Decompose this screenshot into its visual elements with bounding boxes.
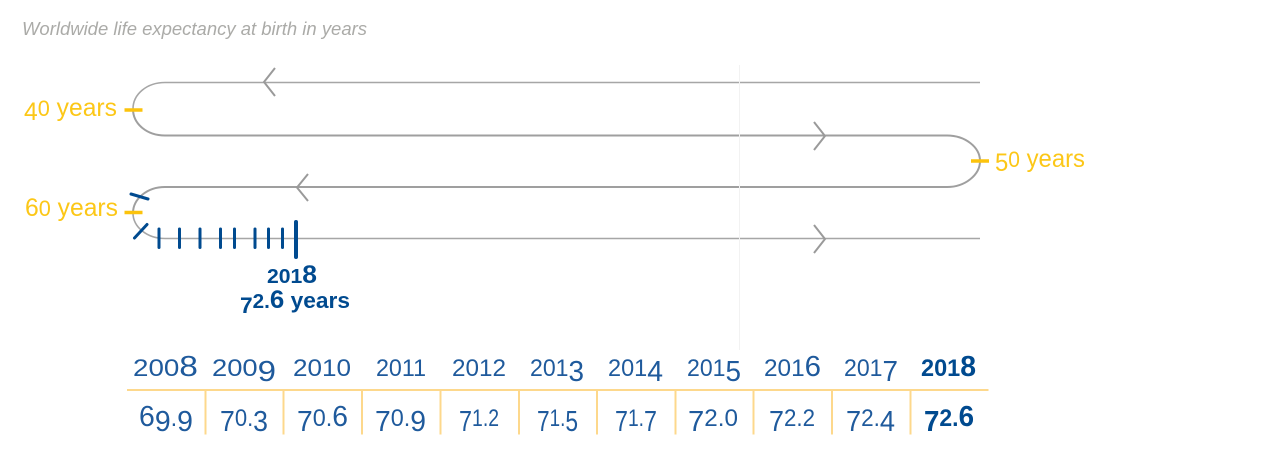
value row: 7 <box>297 406 313 438</box>
value row: 7 <box>459 406 472 438</box>
value row: 7 <box>644 406 657 438</box>
year row <box>133 351 976 388</box>
life expectancy ticks 2008 to 2018 <box>131 194 296 257</box>
year row: 201 <box>608 355 648 382</box>
year row: 5 <box>725 356 741 388</box>
year row: 2016 <box>764 351 821 383</box>
value row: . <box>171 405 177 432</box>
year row: 2010 <box>293 355 351 382</box>
year row: 2008 <box>133 351 198 383</box>
callout: 2018 value: 2018 <box>267 261 317 289</box>
marker: 40 years <box>24 94 142 126</box>
value row: 9 <box>410 406 426 438</box>
data table <box>127 351 988 438</box>
year row: 201 <box>530 355 570 382</box>
value row: 7 <box>846 406 861 438</box>
year row: 2012 <box>452 355 506 382</box>
value row: 2. <box>939 405 959 432</box>
callout: 2018 value <box>240 261 350 318</box>
arrow: leftward, 40-year row <box>264 68 275 96</box>
marker: 50 years: 5 <box>995 149 1008 177</box>
year row: 2018 <box>921 351 976 383</box>
year row: 9 <box>258 356 276 388</box>
marker: 60 years: 60 years <box>25 194 118 222</box>
marker: 50 years: years <box>1027 145 1088 173</box>
value row: 1.2 <box>472 405 499 432</box>
value row: 2.2 <box>784 405 815 432</box>
value row: 5 <box>565 406 578 438</box>
value row: 2.0 <box>704 405 738 432</box>
value row: 0. <box>391 405 410 432</box>
value row: 0. <box>313 405 332 432</box>
year row: 7 <box>882 356 898 388</box>
value row: 0. <box>235 405 253 432</box>
value row: 7 <box>375 406 391 438</box>
value row: 7 <box>924 406 939 438</box>
value row: 7 <box>220 406 235 438</box>
year row: 3 <box>568 356 584 388</box>
marker: 40 years: 4 <box>24 98 38 126</box>
year row: 2011 <box>376 355 426 382</box>
callout: 2018 value: 2. <box>253 291 270 313</box>
callout: 2018 value: 6 years <box>270 286 348 314</box>
table rules <box>127 390 988 434</box>
marker: 40 years: years <box>57 94 118 122</box>
value row: 4 <box>880 406 895 438</box>
value row: 6 <box>959 401 974 433</box>
year row: 201 <box>844 355 884 382</box>
value row: 6 <box>332 401 348 433</box>
serpentine timeline <box>133 65 980 350</box>
value row: 9 <box>177 406 193 438</box>
arrow: rightward, final row <box>814 225 825 253</box>
value row: 1. <box>628 405 644 432</box>
value row: 6 <box>139 401 155 433</box>
subtitle: Worldwide life expectancy at birth in years <box>22 19 367 39</box>
value row: 7 <box>537 406 550 438</box>
year row: 200 <box>212 355 252 382</box>
value row: 7 <box>615 406 628 438</box>
arrow: rightward, 50-year row <box>814 122 825 150</box>
value row: 7 <box>769 406 784 438</box>
marker: 40 years: 0 <box>38 96 50 121</box>
value row: 7 <box>688 406 704 438</box>
timeline track <box>133 82 980 238</box>
year row: 4 <box>647 356 663 388</box>
faint vertical guide <box>738 65 740 350</box>
value row: 9 <box>155 406 171 438</box>
callout: 2018 value: 7 <box>240 293 253 318</box>
year row: 201 <box>687 355 727 382</box>
value row: 3 <box>253 406 268 438</box>
value row: 1. <box>550 405 565 432</box>
marker: 50 years: 0 <box>1008 147 1020 172</box>
marker: 50 years <box>971 145 1085 177</box>
value row <box>139 401 974 438</box>
arrow: leftward, 60-year row <box>297 174 308 201</box>
value row: 2. <box>861 405 880 432</box>
